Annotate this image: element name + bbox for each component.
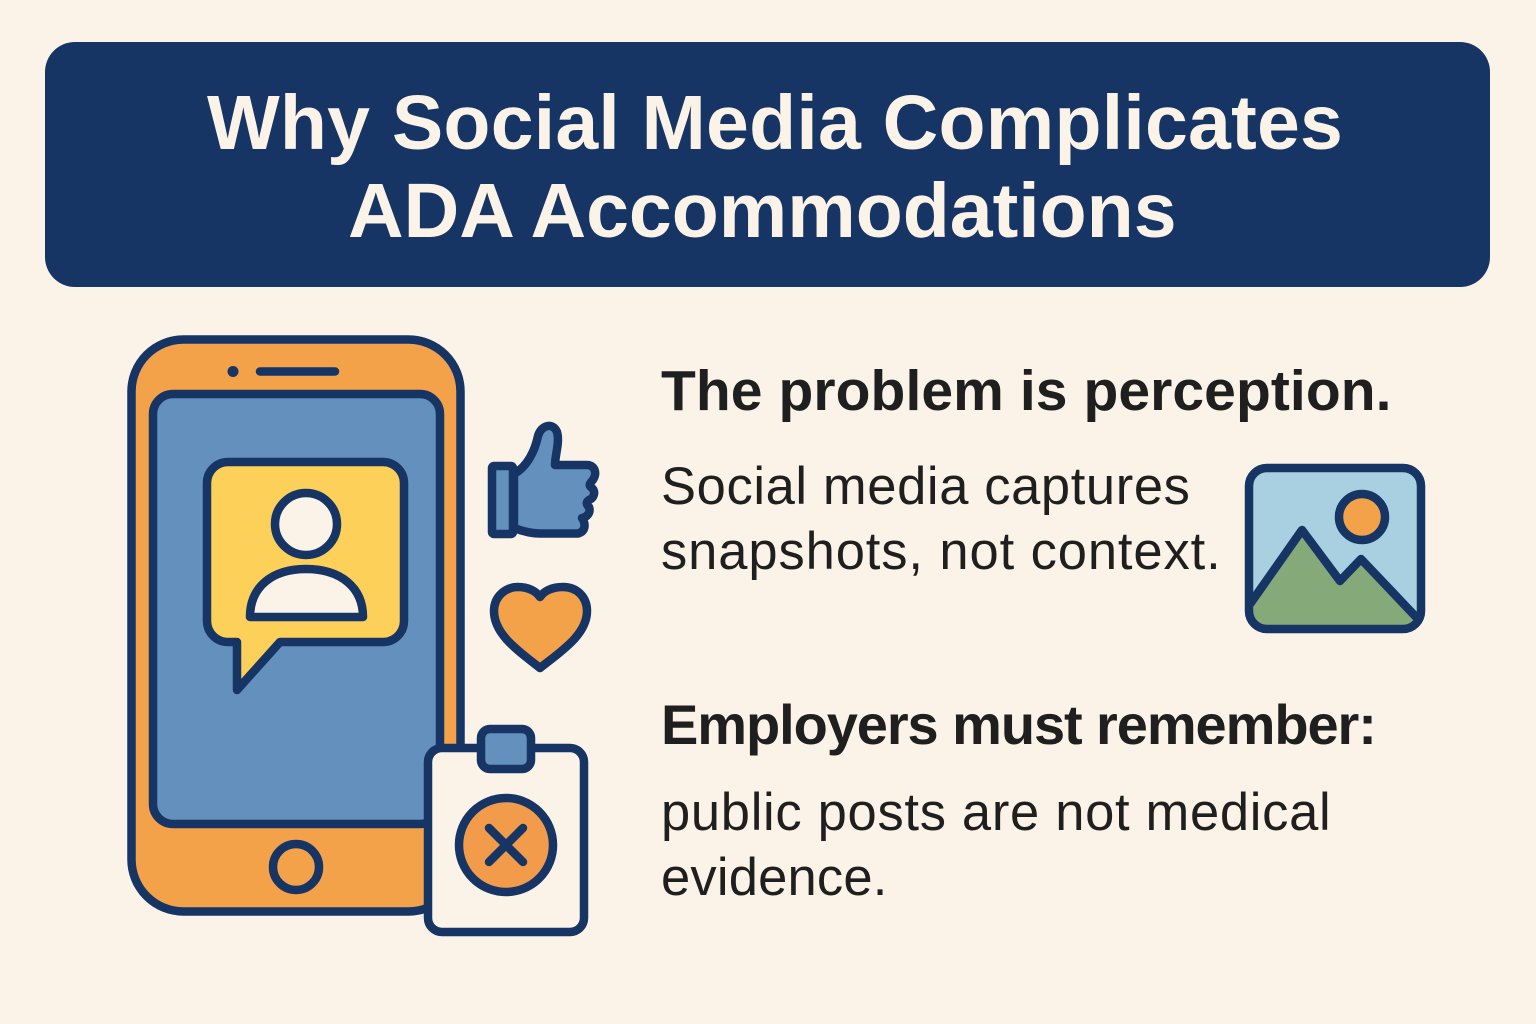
title text: Why Social Media Complicates	[207, 80, 1343, 166]
icon: smartphone	[132, 340, 460, 912]
title banner	[45, 42, 1490, 287]
text: public posts: evidence.	[661, 848, 888, 907]
text: public posts: public posts are not medical	[661, 783, 1331, 842]
icon: badge with X	[428, 729, 584, 932]
icon: photo	[1249, 468, 1421, 629]
icon: heart	[494, 587, 587, 668]
heading: the problem is perception: The problem is perception.	[661, 359, 1392, 423]
icon: profile speech bubble	[207, 462, 404, 690]
text: public posts	[661, 783, 1331, 907]
heading: employers must remember: Employers must remember:	[661, 693, 1376, 756]
text: snapshots: snapshots, not context.	[661, 522, 1222, 581]
text: snapshots	[661, 457, 1222, 581]
text: snapshots: Social media captures	[661, 457, 1191, 516]
icon: thumbs up	[492, 426, 595, 534]
title text	[207, 80, 1343, 254]
title text: ADA Accommodations	[348, 168, 1177, 254]
